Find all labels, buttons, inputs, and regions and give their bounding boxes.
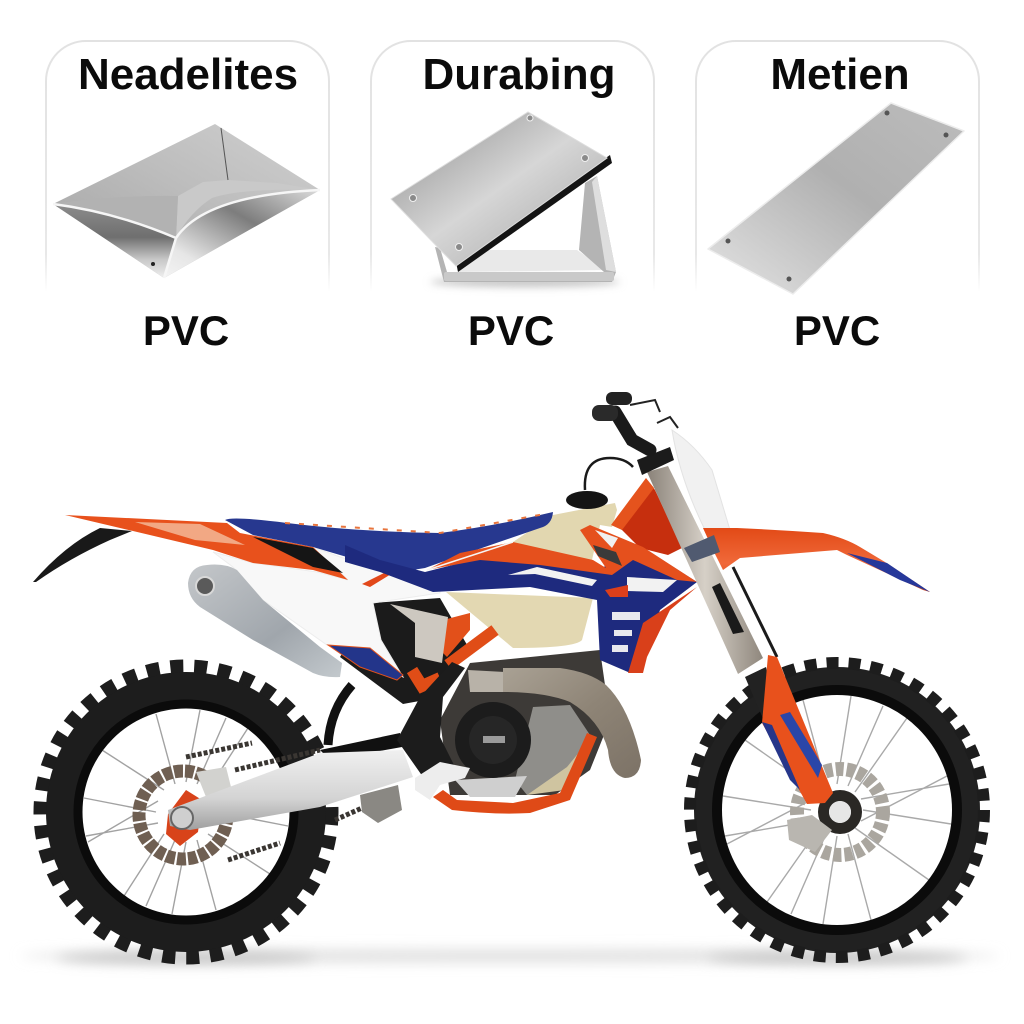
icon: flat metal plate xyxy=(708,103,964,294)
exhaust header xyxy=(468,670,505,692)
icon: folded metal sheet xyxy=(53,124,320,278)
panel: Metien xyxy=(696,41,979,354)
chain xyxy=(186,743,362,860)
handlebar and grip xyxy=(592,392,678,450)
front wheel xyxy=(690,663,984,957)
heading: Durabing: Durabing xyxy=(422,50,616,99)
front fork xyxy=(637,447,851,823)
front fender xyxy=(703,528,930,592)
orange tube frame xyxy=(412,478,682,686)
label: PVC: PVC xyxy=(143,307,229,354)
footpeg bracket xyxy=(360,785,402,823)
label: PVC: PVC xyxy=(794,307,880,354)
engine xyxy=(440,650,610,797)
seat xyxy=(225,512,553,572)
side bracket xyxy=(390,604,448,663)
chain guard bar xyxy=(320,733,402,760)
silencer xyxy=(188,565,342,677)
white side panel xyxy=(213,547,440,677)
ground shadow xyxy=(20,949,1000,964)
heading: Neadelites: Neadelites xyxy=(78,50,298,99)
label: PVC: PVC xyxy=(468,307,554,354)
panel: Neadelites xyxy=(46,41,329,354)
black frame guard xyxy=(397,662,465,777)
panel: Durabing xyxy=(371,41,654,354)
rear shock strut xyxy=(328,685,352,745)
rear fender xyxy=(65,515,348,580)
icon: tilted metal plate on stand xyxy=(391,112,620,287)
fender decal xyxy=(847,553,930,592)
white panel decal xyxy=(328,645,403,680)
radiator shroud graphics xyxy=(345,525,697,673)
rear wheel xyxy=(40,666,332,958)
illustration: orange and blue dirt bike xyxy=(33,392,984,958)
rear mudflap xyxy=(33,528,132,582)
swingarm xyxy=(168,750,413,830)
heading: Metien: Metien xyxy=(770,50,910,99)
number plate xyxy=(672,430,730,532)
beige fuel tank xyxy=(446,458,633,648)
dark mid frame xyxy=(340,598,470,704)
exhaust pipe xyxy=(503,668,641,778)
orange skid plate xyxy=(433,733,597,814)
